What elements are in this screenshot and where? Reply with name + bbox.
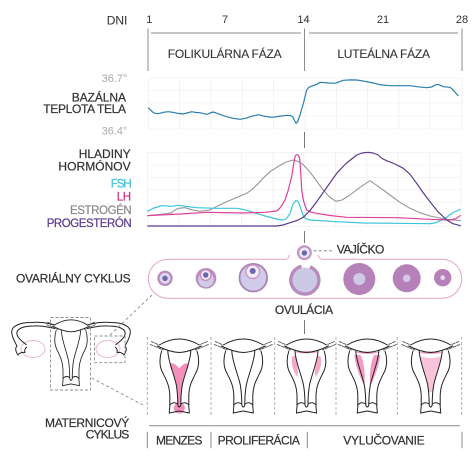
panel: ovarian cycle capsule <box>148 255 462 298</box>
uterus: proliferation <box>214 339 272 413</box>
heading: hormone levels <box>58 147 131 173</box>
follicle 2 <box>196 268 216 289</box>
label: egg: VAJÍČKO <box>337 242 384 256</box>
legend: hormones: PROGESTERÓN <box>47 217 132 230</box>
label: ovulation: OVULÁCIA <box>275 302 333 317</box>
legend: hormones: LH <box>117 192 131 204</box>
corpus luteum 2 <box>393 264 421 292</box>
heading: hormone levels: HLADINY <box>79 147 131 161</box>
stage label: proliferation: PROLIFERÁCIA <box>218 432 300 448</box>
curve: estrogen <box>147 160 461 221</box>
phase bracket <box>148 28 462 71</box>
curve: LH <box>147 155 461 220</box>
leader to uterine cycle <box>92 378 143 405</box>
stage bracket <box>147 426 462 448</box>
anatomy: reproductive system <box>12 318 130 390</box>
ovulating follicle <box>291 266 319 294</box>
chart: basal temperature <box>148 78 462 129</box>
heading: uterine cycle: MATERNICOVÝ <box>45 415 129 430</box>
temperature scale low: 36.4° <box>102 126 127 138</box>
stage label: secretion: VYLUČOVANIE <box>343 432 425 448</box>
heading: ovarian cycle: OVARIÁLNY CYKLUS <box>16 270 131 286</box>
panel dividers: uterus <box>147 337 462 416</box>
egg leader <box>314 250 333 252</box>
temperature scale high: 36.7° <box>102 73 127 85</box>
detail box: ovary <box>94 336 125 363</box>
heading: basal body temperature <box>43 90 126 116</box>
fallopian tube left <box>12 322 55 355</box>
fallopian tube right <box>87 322 130 355</box>
phase label: luteal: LUTEÁLNA FÁZA <box>337 46 430 61</box>
day axis label: DNI <box>107 14 127 28</box>
uterus: menses <box>150 339 208 414</box>
follicle 3 <box>240 264 267 292</box>
heading: hormone levels: HORMÓNOV <box>58 158 131 173</box>
uterus: early secretion <box>278 339 336 413</box>
curve: FSH <box>147 201 461 224</box>
heading: uterine cycle <box>45 415 129 441</box>
legend: hormones: ESTROGÉN <box>70 204 132 217</box>
curve: progesterone <box>147 152 461 226</box>
uterus: mid secretion <box>338 339 396 413</box>
day numbers <box>146 14 468 26</box>
corpus luteum 3 <box>434 269 451 286</box>
detail box: uterus <box>50 318 90 390</box>
day 14 marker below hormones <box>304 231 306 243</box>
legend: hormones: FSH <box>111 178 132 190</box>
day numbers: 1 <box>146 14 152 26</box>
egg <box>297 245 312 260</box>
day numbers: 28 <box>456 14 468 26</box>
chart: hormone levels <box>147 152 461 227</box>
day 14 marker above hormones <box>304 132 306 148</box>
day numbers: 7 <box>222 14 228 26</box>
ovary left <box>21 340 45 358</box>
ovary right <box>96 340 120 358</box>
heading: basal body temperature: TEPLOTA TELA <box>43 102 126 116</box>
leader to ovarian cycle <box>110 295 152 335</box>
heading: basal body temperature: BAZÁLNA <box>72 90 126 104</box>
follicle 1 <box>157 271 173 286</box>
phase label: follicular: FOLIKULÁRNA FÁZA <box>168 46 282 61</box>
corpus luteum 1 <box>343 263 375 295</box>
ovulation marker <box>304 320 306 334</box>
uterus: late secretion <box>402 339 460 413</box>
stage label: menses: MENZES <box>156 434 202 448</box>
legend: hormones <box>47 178 132 230</box>
heading: uterine cycle: CYKLUS <box>86 427 129 441</box>
uterus <box>47 320 95 386</box>
day numbers: 21 <box>377 14 389 26</box>
day numbers: 14 <box>297 14 310 26</box>
